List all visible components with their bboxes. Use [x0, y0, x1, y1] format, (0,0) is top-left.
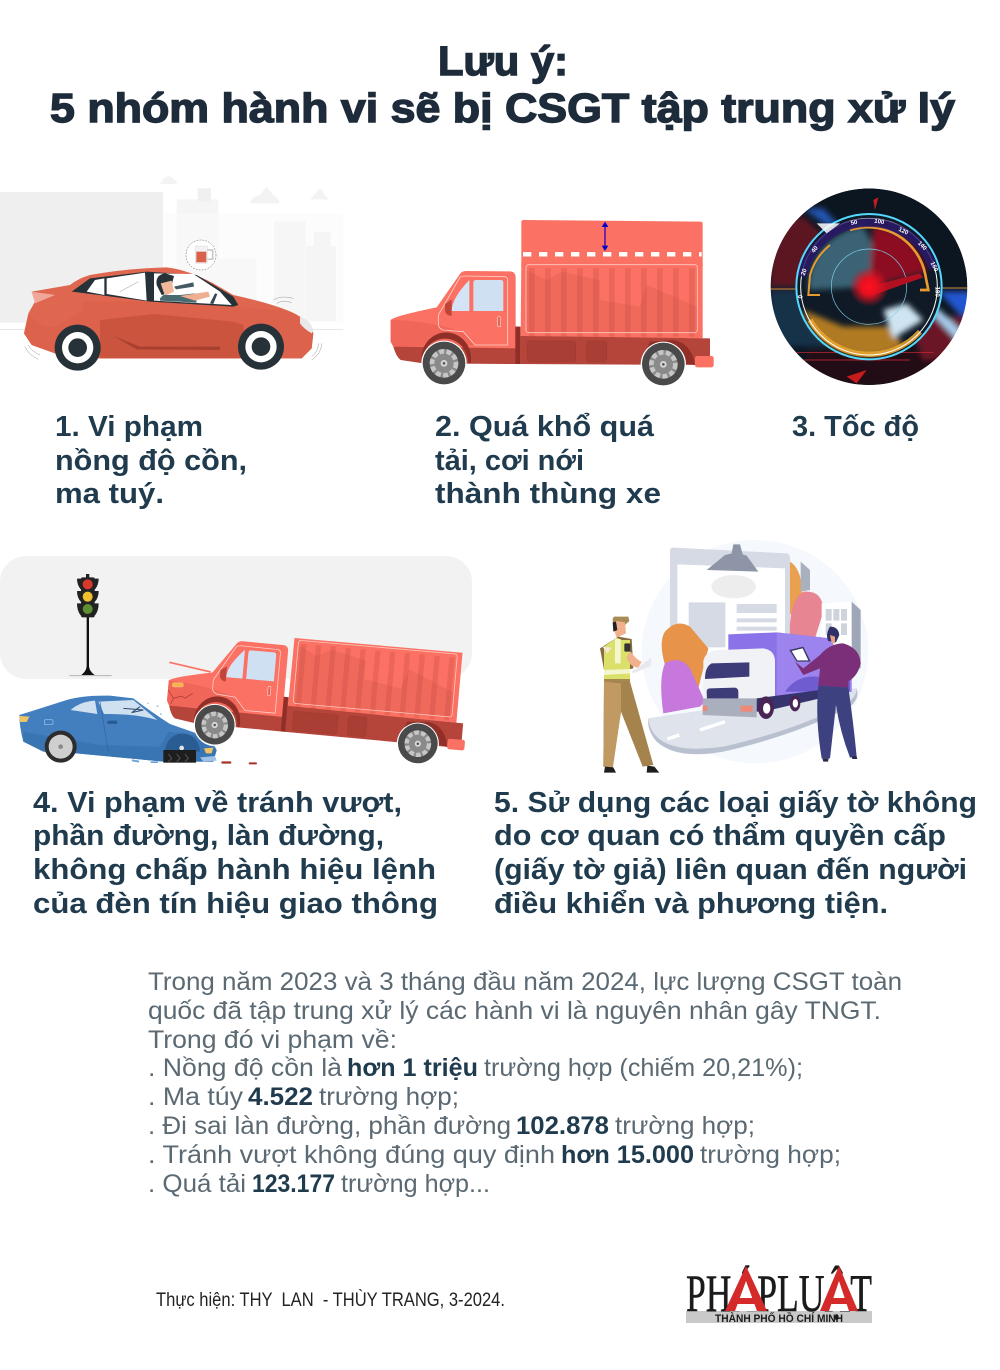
heading: 5: do cơ quan có thẩm quyền cấp [494, 820, 946, 852]
heading: 4: của đèn tín hiệu giao thông [33, 888, 438, 920]
illustration: speedometer: 180 [933, 287, 939, 297]
text block: statistics: . Nồng độ cồn là [148, 1054, 342, 1082]
text block: statistics: Trong năm 2023 và 3 tháng đầu năm 2024, lực lượng CSGT toàn [148, 968, 902, 996]
text block: statistics: trường hợp; [700, 1141, 841, 1169]
illustration: speedometer: 160 [929, 261, 939, 273]
heading: 1: 1. Vi phạm [55, 411, 203, 443]
illustration: speedometer: 100 [874, 219, 885, 226]
text block: statistics: trường hợp (chiếm 20,21%); [484, 1054, 803, 1082]
illustration: drunk driver in red car [0, 176, 343, 371]
text block: statistics: 102.878 [516, 1112, 609, 1140]
heading: 5: (giấy tờ giả) liên quan đến người [494, 854, 967, 886]
text block: statistics: . Tránh vượt không đúng quy định [148, 1141, 555, 1169]
heading: 4: không chấp hành hiệu lệnh [33, 854, 436, 886]
heading: 4 [33, 787, 438, 920]
text block: statistics: hơn 15.000 [561, 1141, 694, 1169]
logo: Pháp Luật [686, 1265, 872, 1325]
heading: 2: 2. Quá khổ quá [435, 411, 655, 443]
text block: statistics: 123.177 [252, 1170, 335, 1198]
heading: 5: 5. Sử dụng các loại giấy tờ không [494, 787, 977, 819]
text block: statistics: 4.522 [248, 1083, 313, 1111]
title [50, 38, 955, 131]
heading: 1: nồng độ cồn, [55, 445, 247, 477]
illustration: speedometer: 140 [916, 241, 928, 252]
heading: 5: điều khiển và phương tiện. [494, 888, 888, 920]
text block: statistics: Trong đó vi phạm về: [148, 1026, 397, 1054]
illustration: speedometer: 0 [798, 294, 804, 298]
illustration: speedometer: 20 [801, 268, 809, 276]
heading: 1 [55, 411, 247, 510]
illustration: speedometer [770, 188, 973, 387]
text block: statistics: trường hợp; [319, 1083, 459, 1111]
illustration: overloaded truck [391, 220, 714, 387]
illustration: traffic light and crash [0, 556, 473, 769]
text block: statistics: . Quá tải [148, 1170, 246, 1198]
heading: 3: 3. Tốc độ [792, 411, 919, 443]
illustration: speedometer: 50 [850, 220, 859, 227]
credit: Thực hiện: THY LAN - THÙY TRANG, 3-2024. [156, 1289, 505, 1311]
illustration: police officer checking truck papers [600, 540, 868, 773]
heading: 2 [435, 411, 661, 510]
heading: 4: 4. Vi phạm về tránh vượt, [33, 787, 402, 819]
title: 5 nhóm hành vi sẽ bị CSGT tập trung xử lý [50, 85, 955, 131]
logo: Pháp Luật: PHÁPLUẬT [686, 1265, 872, 1323]
heading: 2: thành thùng xe [435, 478, 661, 510]
text block: statistics [148, 968, 902, 1198]
text block: statistics: hơn 1 triệu [347, 1054, 478, 1082]
text block: statistics: . Đi sai làn đường, phần đường [148, 1112, 511, 1140]
heading: 1: ma tuý. [55, 478, 164, 510]
heading: 2: tải, cơi nới [435, 445, 584, 477]
text block: statistics: trường hợp; [615, 1112, 755, 1140]
logo: Pháp Luật: THÀNH PHỐ HỒ CHÍ MINH [715, 1311, 843, 1325]
text block: statistics: . Ma túy [148, 1083, 244, 1111]
text block: statistics: trường hợp... [341, 1170, 490, 1198]
title: Lưu ý: [438, 38, 568, 84]
text block: statistics: quốc đã tập trung xử lý các hành vi là nguyên nhân gây TNGT. [148, 997, 881, 1025]
heading: 5 [494, 787, 977, 920]
illustration: speedometer: 120 [897, 227, 909, 237]
heading: 4: phần đường, làn đường, [33, 820, 384, 852]
illustration: speedometer: 40 [811, 245, 820, 255]
